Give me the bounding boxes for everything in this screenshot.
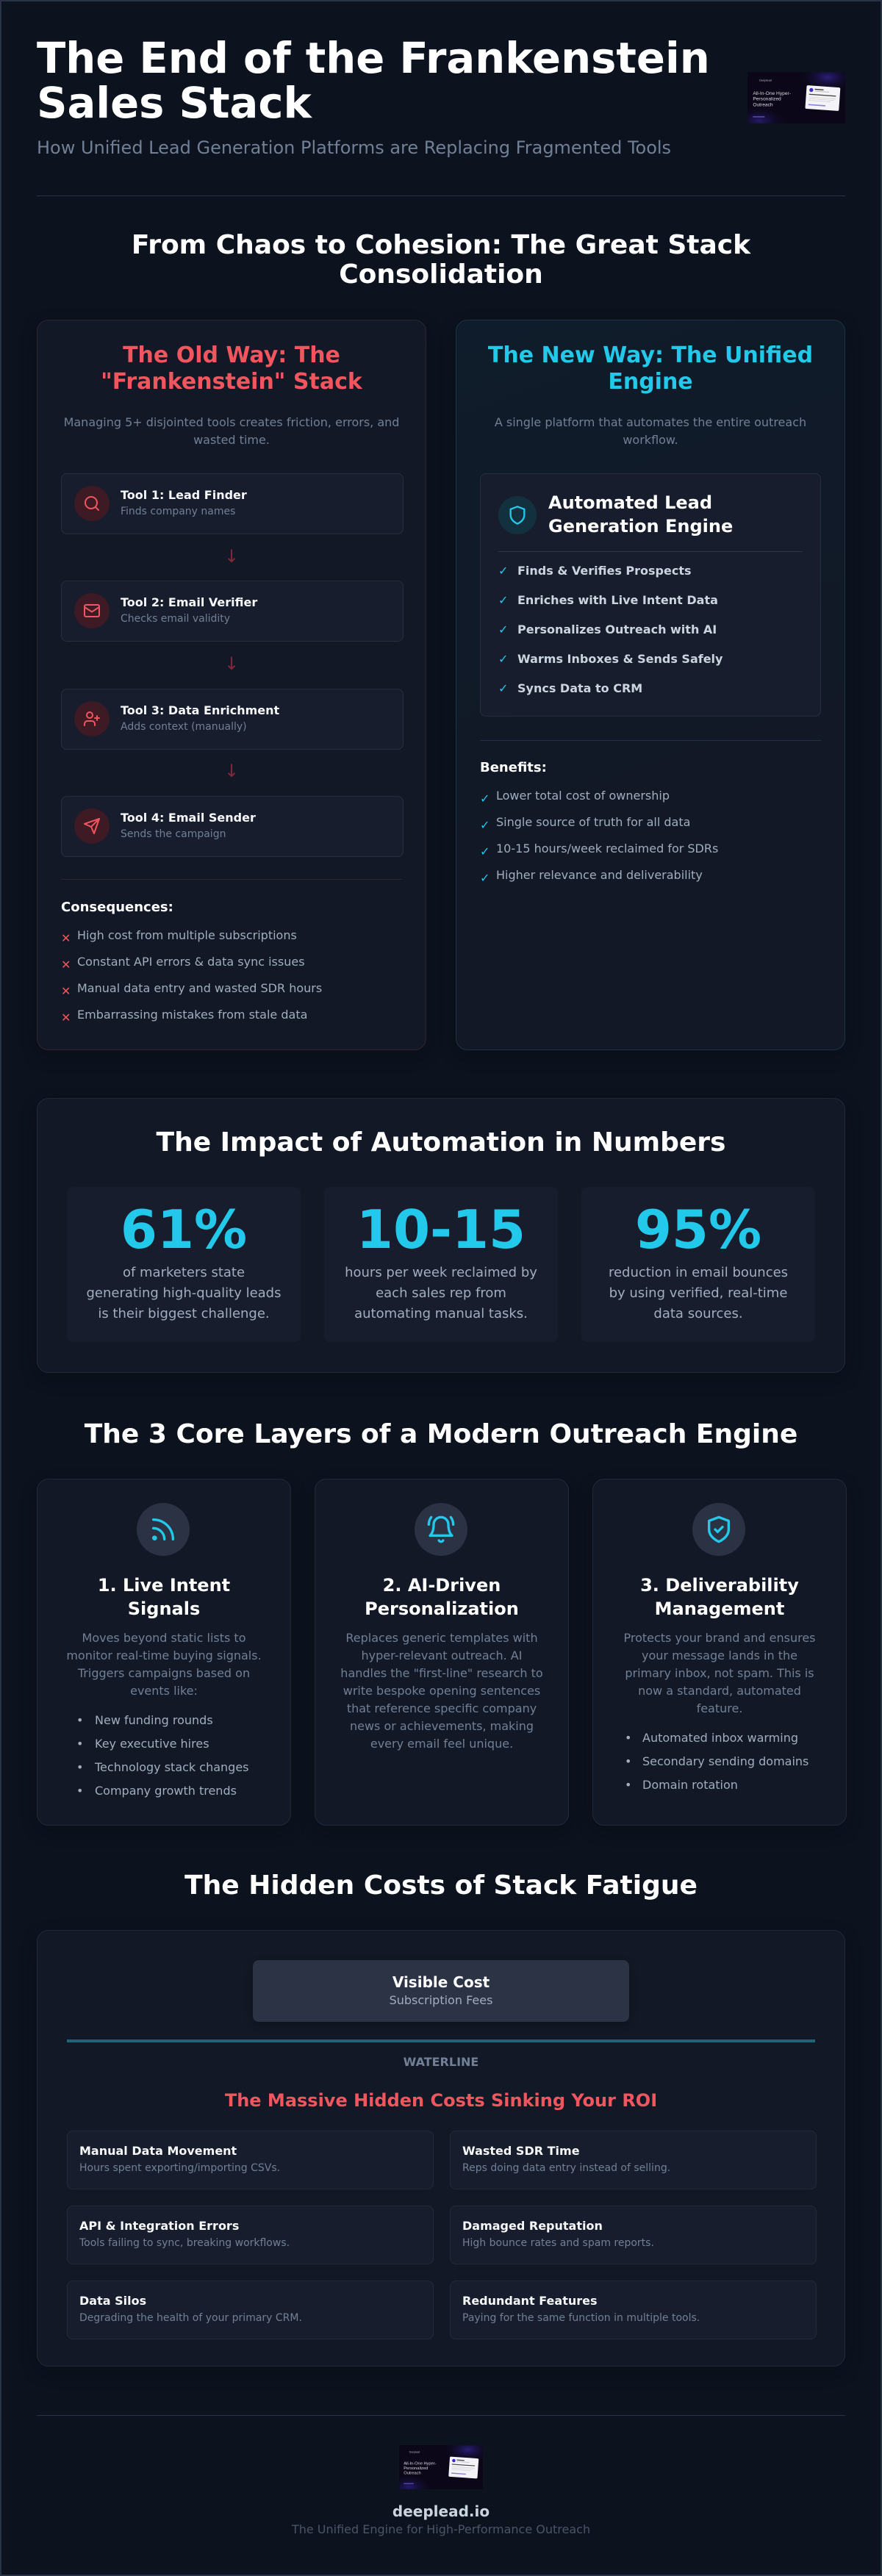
icon: shield: [498, 496, 537, 534]
card: deliverability management: Protects your brand and ensures: [623, 1631, 816, 1645]
heading: new way: Engine: [608, 369, 693, 395]
tool 3: Tool 3: Data Enrichment: [121, 703, 279, 717]
list: consequences: [61, 928, 322, 1025]
cost: data silos: [67, 2281, 434, 2339]
stat: 61%: 61%: [121, 1199, 247, 1260]
card: deliverability management: feature.: [697, 1701, 742, 1715]
logo: deeplead header thumbnail: [747, 72, 845, 123]
stat: 10-15: hours per week reclaimed by: [345, 1265, 537, 1280]
logo: deeplead footer thumbnail: [399, 2445, 483, 2489]
list: consequences: Embarrassing mistakes from stale data: [77, 1008, 307, 1022]
stat: 61%: is their biggest challenge.: [98, 1306, 270, 1321]
card: deliverability management: Domain rotation: [642, 1778, 738, 1792]
text: new way description: A single platform that automates the entire outreach: [495, 415, 806, 429]
heading: impact: The Impact of Automation in Numbers: [157, 1127, 725, 1158]
list: benefits: ✓: [480, 871, 490, 885]
card: AI-driven personalization: Personalization: [365, 1599, 519, 1619]
card: deliverability management: Secondary sending domains: [642, 1754, 808, 1768]
card: live intent signals: monitor real-time buying signals.: [66, 1648, 262, 1662]
footer tagline: The Unified Engine for High-Performance Outreach: [292, 2522, 590, 2536]
tool 2: [61, 581, 404, 642]
stat: 95%: 95%: [635, 1199, 761, 1260]
heading: consequences: Consequences:: [61, 900, 173, 915]
list: benefits: Higher relevance and deliverability: [496, 868, 703, 882]
heading: core layers: The 3 Core Layers of a Modern Outreach Engine: [85, 1419, 797, 1449]
card: automated engine: [480, 473, 821, 717]
card: automated engine: ✓: [498, 623, 508, 636]
cost: API errors: API & Integration Errors: [79, 2219, 239, 2233]
card: deliverability management: your message lands in the: [642, 1648, 797, 1662]
heading: new way: [488, 342, 813, 395]
card: AI-driven personalization: write bespoke opening sentences: [343, 1684, 540, 1698]
cost: wasted SDR time: Reps doing data entry instead of selling.: [462, 2162, 670, 2174]
list: consequences: Manual data entry and wasted SDR hours: [77, 981, 322, 995]
logo: deeplead footer thumbnail: Deeplead: [409, 2451, 420, 2454]
cost: data silos: Degrading the health of your primary CRM.: [79, 2312, 302, 2324]
stat: 10-15: [324, 1187, 558, 1342]
cost: wasted SDR time: Wasted SDR Time: [462, 2144, 580, 2158]
card: deliverability management: now a standard, automated: [638, 1684, 801, 1698]
card: AI-driven personalization: Replaces generic templates with: [345, 1631, 538, 1645]
tool 4: Tool 4: Email Sender: [121, 811, 256, 825]
tool 4: Sends the campaign: [121, 828, 226, 840]
list: benefits: [480, 789, 718, 885]
card: deliverability management: 3. Deliverability: [640, 1575, 799, 1596]
stat: 61%: of marketers state: [123, 1265, 245, 1280]
card: live intent signals: Moves beyond static lists to: [82, 1631, 245, 1645]
card: automated engine: ✓: [498, 681, 508, 695]
text: new way description: workflow.: [623, 433, 678, 447]
text: new way description: [495, 415, 806, 447]
logo: deeplead header thumbnail: All-In-One Hyper-: [753, 91, 791, 96]
card: AI-driven personalization: every email feel unique.: [370, 1737, 513, 1751]
heading: new way: The New Way: The Unified: [488, 342, 813, 368]
text: old way description: [64, 415, 399, 447]
list: benefits: Single source of truth for all data: [496, 815, 690, 829]
stat: 61%: generating high-quality leads: [87, 1285, 281, 1301]
heading: hidden costs: The Hidden Costs of Stack Fatigue: [184, 1870, 698, 1901]
logo: deeplead footer thumbnail: All-In-One Hyper-: [404, 2462, 437, 2466]
waterline: [67, 2039, 815, 2042]
arrow: ↓: [224, 546, 239, 567]
stat: 10-15: automating manual tasks.: [354, 1306, 528, 1321]
title: Sales Stack: [37, 79, 312, 128]
card: live intent signals: •: [76, 1760, 83, 1774]
card: deliverability management: •: [625, 1731, 631, 1745]
card: automated engine: Warms Inboxes & Sends Safely: [517, 652, 723, 666]
card: automated engine: Generation Engine: [548, 516, 733, 537]
tool 1: Finds company names: [121, 506, 235, 517]
card: live intent signals: •: [76, 1784, 83, 1798]
tool 3: Adds context (manually): [121, 721, 247, 733]
box: visible cost: Visible Cost: [392, 1973, 490, 1991]
tool 2: Checks email validity: [121, 613, 230, 625]
cost: manual data movement: Manual Data Movement: [79, 2144, 237, 2158]
card: live intent signals: Triggers campaigns based on: [78, 1666, 250, 1680]
card: AI-driven personalization: news or achievements, making: [350, 1719, 534, 1733]
panel: hidden costs: [37, 1930, 845, 2367]
cost: damaged reputation: Damaged Reputation: [462, 2219, 603, 2233]
cost: manual data movement: Hours spent exporting/importing CSVs.: [79, 2162, 280, 2174]
list: benefits: ✓: [480, 818, 490, 832]
card: AI-driven personalization: handles the "first-line" research to: [340, 1666, 543, 1680]
panel: impact in numbers: [37, 1098, 845, 1373]
card: automated engine: ✓: [498, 564, 508, 578]
tool 1: [61, 473, 404, 534]
card: live intent signals: Signals: [128, 1599, 200, 1619]
cost: wasted SDR time: [450, 2131, 817, 2189]
card: AI-driven personalization: hyper-relevant outreach. AI: [362, 1648, 522, 1662]
card: live intent signals: New funding rounds: [95, 1713, 213, 1727]
title: The End of the Frankenstein: [37, 34, 710, 83]
list: benefits: Lower total cost of ownership: [496, 789, 670, 803]
footer brand: deeplead.io: [392, 2503, 490, 2520]
card: deliverability management: •: [625, 1778, 631, 1792]
cost: redundant features: Paying for the same function in multiple tools.: [462, 2312, 700, 2324]
cost: damaged reputation: [450, 2206, 817, 2264]
list: consequences: Constant API errors & data sync issues: [77, 955, 305, 969]
card: live intent signals: Key executive hires: [95, 1737, 209, 1751]
box: visible cost: Subscription Fees: [390, 1993, 492, 2007]
card: live intent signals: Technology stack changes: [95, 1760, 248, 1774]
card: live intent signals: [37, 1479, 291, 1826]
cost: manual data movement: [67, 2131, 434, 2189]
card: automated engine: Syncs Data to CRM: [517, 681, 642, 695]
logo: deeplead header thumbnail: Outreach: [753, 102, 773, 107]
tool 3: [61, 689, 404, 750]
list: benefits: 10-15 hours/week reclaimed for SDRs: [496, 842, 718, 855]
stat: 95%: reduction in email bounces: [609, 1265, 788, 1280]
tool 4: [61, 796, 404, 857]
heading: chaos to cohesion: From Chaos to Cohesion: The Great Stack: [132, 230, 750, 260]
list: consequences: ✕: [61, 984, 71, 998]
icon: bell: [415, 1503, 467, 1556]
card: live intent signals: Company growth trends: [95, 1784, 237, 1798]
tool 2: Tool 2: Email Verifier: [121, 595, 257, 609]
card: AI-driven personalization: [315, 1479, 569, 1826]
list: consequences: ✕: [61, 1011, 71, 1025]
panel: new way: [456, 320, 845, 1050]
list: consequences: ✕: [61, 958, 71, 972]
cost: API errors: Tools failing to sync, breaking workflows.: [79, 2237, 290, 2249]
heading: chaos to cohesion: Consolidation: [339, 259, 543, 290]
card: AI-driven personalization: that reference specific company: [347, 1701, 537, 1715]
subtitle: How Unified Lead Generation Platforms are Replacing Fragmented Tools: [37, 137, 671, 158]
card: deliverability management: primary inbox, not spam. This is: [625, 1666, 814, 1680]
list: benefits: ✓: [480, 844, 490, 858]
arrow: ↓: [224, 761, 239, 781]
cost: damaged reputation: High bounce rates and spam reports.: [462, 2237, 654, 2249]
text: old way description: wasted time.: [193, 433, 270, 447]
cost: data silos: Data Silos: [79, 2294, 146, 2308]
card: automated engine: ✓: [498, 593, 508, 607]
card: live intent signals: •: [76, 1737, 83, 1751]
card: AI-driven personalization: 2. AI-Driven: [383, 1575, 501, 1596]
card: automated engine: ✓: [498, 652, 508, 666]
heading: chaos to cohesion: [132, 230, 751, 290]
stat: 95%: [581, 1187, 815, 1342]
logo: deeplead footer thumbnail: Outreach: [404, 2472, 421, 2476]
label: waterline: WATERLINE: [404, 2055, 478, 2069]
stat: 95%: by using verified, real-time: [609, 1285, 787, 1301]
heading: massive hidden costs: The Massive Hidden Costs Sinking Your ROI: [225, 2090, 657, 2111]
heading: old way: The Old Way: The: [123, 342, 340, 368]
panel: old way: [37, 320, 426, 1050]
card: live intent signals: •: [76, 1713, 83, 1727]
cost: redundant features: [450, 2281, 817, 2339]
card: live intent signals: 1. Live Intent: [98, 1575, 230, 1596]
arrow: ↓: [224, 653, 239, 674]
card: automated engine: Enriches with Live Intent Data: [517, 593, 718, 607]
card: automated engine: Personalizes Outreach with AI: [517, 623, 717, 636]
heading: benefits: Benefits:: [480, 760, 547, 775]
list: benefits: ✓: [480, 792, 490, 806]
tool 1: Tool 1: Lead Finder: [121, 488, 247, 502]
stat: 61%: [67, 1187, 301, 1342]
cost: redundant features: Redundant Features: [462, 2294, 597, 2308]
card: live intent signals: events like:: [130, 1684, 198, 1698]
logo: deeplead header thumbnail: Deeplead: [759, 78, 772, 82]
card: deliverability management: Management: [655, 1599, 784, 1619]
box: visible cost: [253, 1960, 629, 2022]
list: consequences: High cost from multiple subscriptions: [77, 928, 297, 942]
icon: rss: [137, 1503, 190, 1556]
list: consequences: ✕: [61, 931, 71, 945]
card: deliverability management: Automated inbox warming: [642, 1731, 798, 1745]
stat: 10-15: 10-15: [356, 1199, 526, 1260]
stat: 10-15: each sales rep from: [376, 1285, 506, 1301]
title: [37, 34, 710, 128]
heading: old way: "Frankenstein" Stack: [101, 369, 362, 395]
logo: deeplead footer thumbnail: Personalized: [404, 2466, 428, 2471]
card: automated engine: Automated Lead: [548, 492, 712, 513]
text: old way description: Managing 5+ disjointed tools creates friction, errors, and: [64, 415, 399, 429]
stat: 95%: data sources.: [653, 1306, 743, 1321]
heading: old way: [101, 342, 363, 395]
icon: shield check: [692, 1503, 745, 1556]
cost: API errors: [67, 2206, 434, 2264]
card: automated engine: Finds & Verifies Prospects: [517, 564, 692, 578]
card: deliverability management: [592, 1479, 847, 1826]
logo: deeplead header thumbnail: Personalized: [753, 97, 781, 102]
card: deliverability management: •: [625, 1754, 631, 1768]
